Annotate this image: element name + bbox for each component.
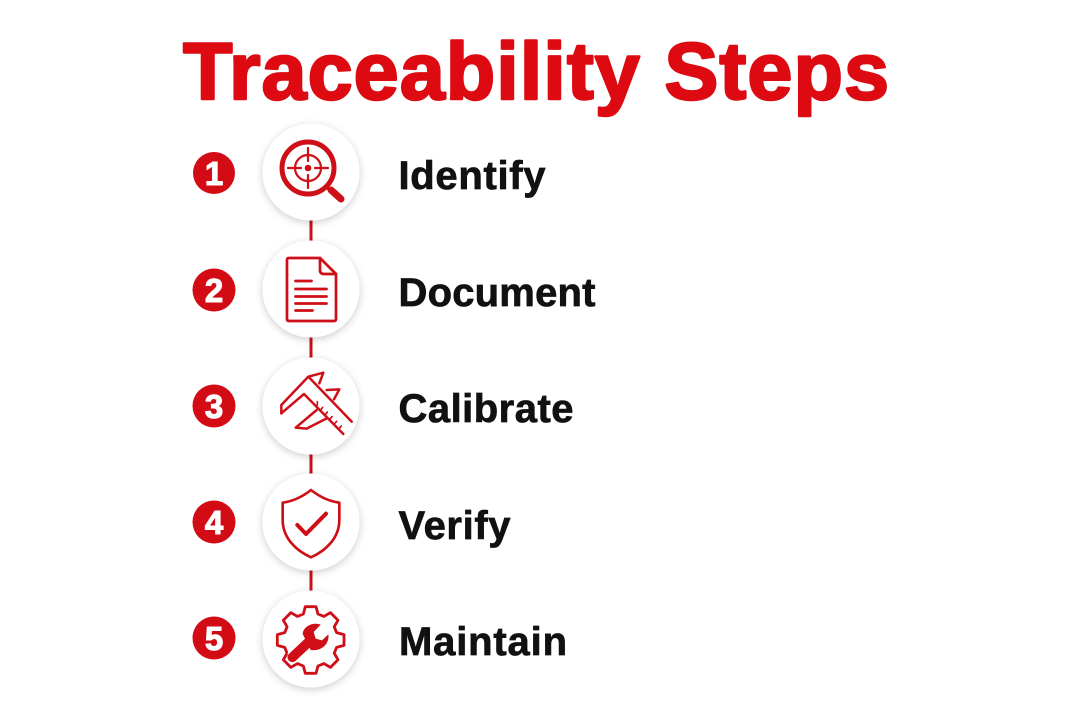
icon: magnifier with target (282, 142, 341, 199)
label: Document: Document (398, 271, 596, 315)
step 3: Calibrate (192, 358, 574, 454)
icon circle 1 (262, 124, 360, 220)
icon: shield with check (283, 490, 339, 557)
label: Maintain: Maintain (399, 620, 567, 664)
number badge 2: 2 (205, 272, 223, 309)
number badge 4 (192, 500, 236, 544)
icon: document (287, 258, 336, 321)
number badge 1 (193, 152, 235, 194)
step 4: Verify (192, 474, 511, 570)
step 1: Identify (193, 124, 546, 220)
connector lines (310, 218, 312, 594)
number badge 3 (192, 384, 236, 428)
number badge 4: 4 (205, 504, 224, 541)
number badge 5 (192, 616, 236, 660)
number badge 3: 3 (205, 388, 223, 425)
step 5: Maintain (192, 590, 567, 688)
title: Traceability Steps (183, 27, 889, 117)
step 2: Document (192, 240, 596, 338)
label: Verify: Verify (398, 504, 511, 548)
icon circle 3 (262, 358, 360, 454)
icon circle 5 (262, 590, 360, 688)
number badge 5: 5 (205, 620, 223, 657)
number badge 2 (192, 268, 236, 312)
number badge 1: 1 (205, 155, 223, 192)
icon circle 2 (262, 240, 360, 338)
label: Calibrate: Calibrate (398, 387, 574, 431)
icon: gear with wrench (277, 607, 344, 673)
icon: caliper (281, 373, 352, 434)
icon circle 4 (262, 474, 360, 570)
label: Identify: Identify (398, 154, 546, 198)
